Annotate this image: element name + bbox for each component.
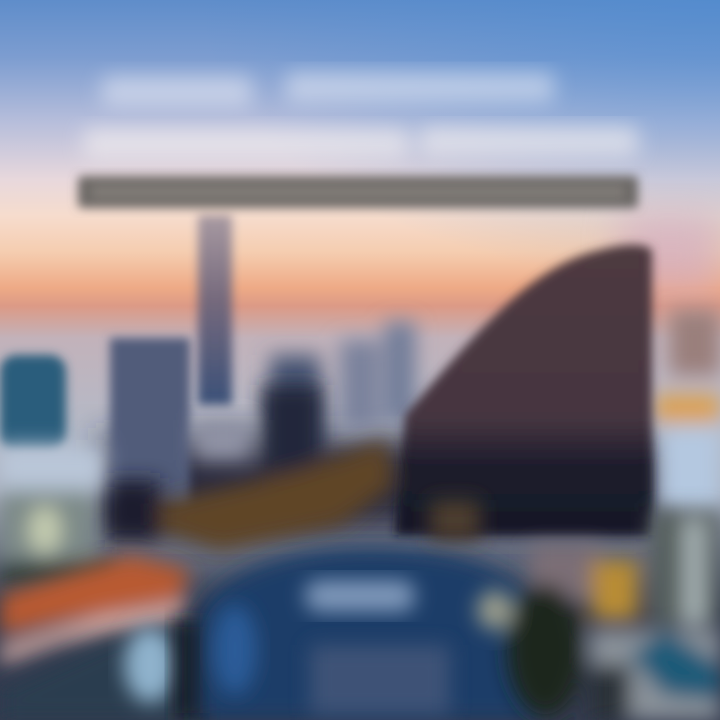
title line 1 xyxy=(102,72,554,106)
left teal building xyxy=(0,355,66,450)
lower-left white and green buildings xyxy=(0,445,115,584)
curved dark building xyxy=(395,245,652,535)
subtitle banner xyxy=(78,176,638,208)
blue foreground building xyxy=(200,548,540,720)
title line 2 xyxy=(84,126,638,158)
right foreground buildings and trees xyxy=(430,500,720,720)
dark ground base xyxy=(0,440,720,720)
foreground dark base xyxy=(0,620,210,720)
mid-ground buildings xyxy=(105,385,395,550)
tall tower xyxy=(198,215,232,405)
central block building xyxy=(110,338,190,508)
blurred far skyline xyxy=(270,310,720,510)
orange road lights xyxy=(0,555,190,665)
